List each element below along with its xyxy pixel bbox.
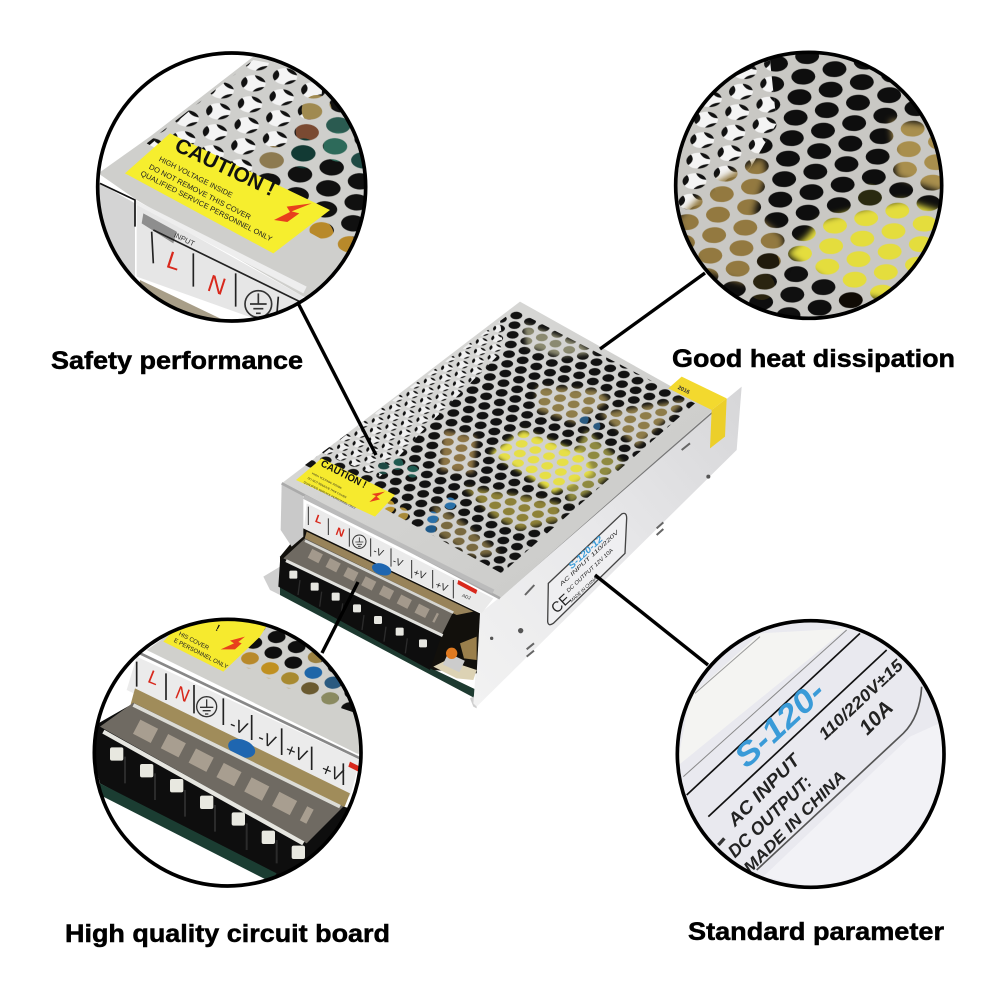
- yellow date label on corner: [668, 377, 727, 448]
- label border lines: [683, 630, 922, 870]
- terminal label strip: -V: [372, 546, 385, 560]
- caution label: HIGH VOLTAGE INSIDE: [157, 154, 234, 200]
- caution label: DO NOT REMOVE THIS COVER: [147, 162, 252, 222]
- caution label: CAUTION !: [171, 134, 279, 201]
- product specification label: CE: [548, 591, 574, 617]
- terminal label strip: +V: [434, 580, 449, 595]
- product specification label: DC OUTPUT 12V 10A: [566, 547, 615, 594]
- circle: good heat dissipation detail: [670, 40, 950, 323]
- heading: high quality circuit board: High quality circuit board: [65, 920, 390, 948]
- black terminal block: [87, 703, 357, 877]
- caution label on cover: [296, 458, 395, 517]
- terminal label strip: L: [313, 513, 324, 527]
- callout line: circuit board: [322, 582, 358, 653]
- product specification label: AC INPUT 110/220V: [558, 529, 621, 589]
- terminal label strip: N: [334, 526, 346, 540]
- heading: good heat dissipation: Good heat dissipation: [672, 345, 955, 373]
- caution label on cover: CAUTION !: [319, 459, 368, 491]
- terminal label strip: [282, 483, 500, 613]
- model number: S-120-: [727, 673, 832, 774]
- caution label: QUALIFIED SERVICE PERSONNEL ONLY: [139, 169, 274, 243]
- product specification label: [548, 513, 627, 625]
- terminal strip with L and N: N: [204, 270, 229, 301]
- terminal labels: -V: [227, 713, 251, 739]
- callout line: heat dissipation: [600, 273, 705, 349]
- perforated top cover: [282, 300, 713, 598]
- caution label corner: [163, 621, 266, 672]
- product specification label: MADE IN CHINA: [569, 576, 598, 603]
- callout line: safety performance: [298, 303, 376, 455]
- terminal strip with L and N: [100, 183, 307, 327]
- terminal labels: L: [145, 666, 163, 689]
- right side panel: [473, 387, 742, 707]
- clear terminal cover: [100, 703, 343, 843]
- origin text: MADE IN CHINA: [741, 768, 849, 877]
- caution label corner: E PERSONNEL ONLY: [172, 638, 228, 671]
- orange potentiometer: [443, 648, 465, 672]
- yellow date label on corner: 2016: [676, 385, 690, 396]
- interior below cover: [280, 528, 480, 680]
- gold interior and capacitor: [130, 688, 350, 810]
- terminal strip with L and N: L: [163, 247, 184, 276]
- terminal label strip: +V: [412, 567, 427, 582]
- DC output text: DC OUTPUT:: [724, 772, 816, 862]
- input voltage text: 110/220V±15: [815, 655, 908, 744]
- circle: safety performance detail: [96, 51, 368, 323]
- terminal labels: +V: [318, 758, 347, 785]
- terminal labels: -V: [255, 727, 279, 752]
- bottom flange and circuit board strip: [263, 567, 477, 708]
- terminal strip with L and N: INPUT: [172, 230, 197, 248]
- terminal screws: [110, 747, 305, 859]
- caution label corner: !: [214, 623, 221, 633]
- terminal label strip: ADJ: [461, 593, 471, 601]
- silver cover with holes: [147, 627, 360, 754]
- green circuit board edge: [100, 783, 277, 882]
- heading: standard parameter: Standard parameter: [688, 918, 944, 946]
- current text: 10A: [855, 696, 898, 740]
- terminal screws: [289, 571, 427, 647]
- caution label corner: HIS COVER: [177, 631, 210, 652]
- terminal labels: +V: [282, 739, 311, 766]
- circle: high quality circuit board detail: [87, 610, 370, 886]
- AC input text: AC INPUT: [723, 748, 805, 831]
- front corner of chassis: [281, 483, 303, 547]
- caution label: [125, 133, 330, 253]
- circle: standard parameter detail: [677, 621, 947, 887]
- heading: safety performance: Safety performance: [51, 347, 303, 375]
- perforated metal: [100, 56, 364, 297]
- product: power supply unit: [263, 300, 742, 708]
- terminal label strip: -V: [391, 556, 404, 570]
- callout line: standard parameter: [595, 575, 708, 665]
- black screw terminal block: [278, 538, 453, 670]
- perforated holes: [678, 54, 940, 316]
- blue capacitor: [370, 561, 393, 578]
- fragment of CE mark: [718, 838, 724, 845]
- white upper panel: [677, 628, 847, 767]
- lower panel: [763, 720, 947, 887]
- caution label on cover: DO NOT REMOVE THIS COVER: [307, 476, 347, 499]
- product specification label: S-120-12: [566, 534, 605, 571]
- clear terminal cover: [283, 538, 453, 636]
- terminal labels: N: [173, 682, 193, 706]
- caution label on cover: QUALIFIED SERVICE PERSONNEL ONLY: [303, 480, 357, 510]
- terminal labels: [127, 653, 360, 797]
- caution label on cover: HIGH VOLTAGE INSIDE: [311, 471, 343, 490]
